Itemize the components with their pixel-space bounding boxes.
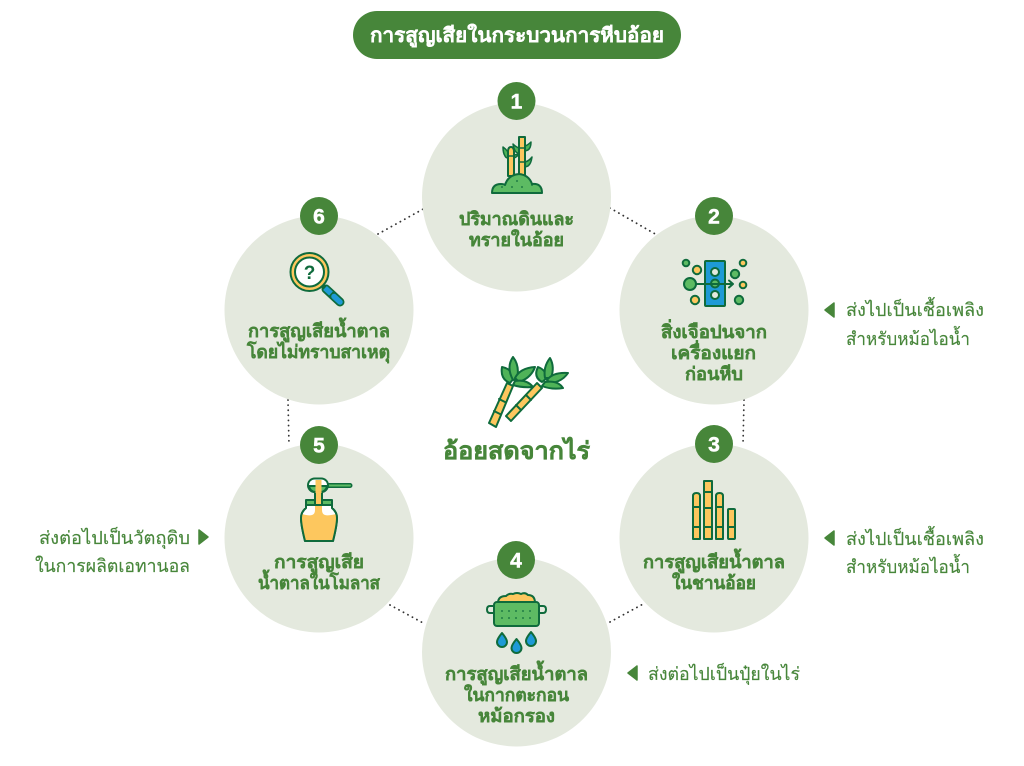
badge 3: 3 xyxy=(708,434,720,456)
label 1: ทรายในอ้อย xyxy=(469,229,564,250)
icon: cane on soil xyxy=(492,137,542,193)
icon: separator xyxy=(683,260,746,306)
label 2: เครื่องแยก xyxy=(671,340,756,363)
callout: step 5 output: ส่งต่อไปเป็นวัตถุดิบ xyxy=(39,526,190,549)
label 5 xyxy=(258,552,381,593)
panel: step 6 unknown loss xyxy=(224,197,414,404)
badge 4: 4 xyxy=(510,550,522,572)
badge 1: 1 xyxy=(511,90,523,114)
label 3: ในชานอ้อย xyxy=(672,572,756,593)
icon: magnifier: ? xyxy=(304,263,315,284)
panel: step 3 bagasse xyxy=(620,425,808,632)
label 5: น้ำตาลในโมลาส xyxy=(258,569,381,593)
badge 3 xyxy=(695,425,733,463)
callout: step 3 output xyxy=(825,526,984,577)
callout: step 2 output xyxy=(825,297,984,349)
panel: step 4 filter cake xyxy=(422,541,611,746)
label 2: ก่อนหีบ xyxy=(685,364,743,384)
center label: อ้อยสดจากไร่ xyxy=(443,436,590,465)
callout: step 4 output: ส่งต่อไปเป็นปุ๋ยในไร่ xyxy=(648,662,800,685)
callout: step 3 output: ส่งไปเป็นเชื้อเพลิง xyxy=(846,526,984,549)
label 3 xyxy=(643,548,785,593)
badge 1 xyxy=(498,82,536,120)
icon: strainer pot xyxy=(487,593,546,653)
icon: cut canes xyxy=(693,481,735,539)
label 3: การสูญเสียน้ำตาล xyxy=(643,548,785,574)
badge 2 xyxy=(695,197,733,235)
label 1 xyxy=(459,209,574,250)
icon: molasses jar xyxy=(301,478,350,541)
callout: step 2 output: สำหรับหม้อไอน้ำ xyxy=(846,326,970,349)
badge 4 xyxy=(497,541,535,579)
label 2: สิ่งเจือปนจาก xyxy=(661,319,767,342)
badge 2: 2 xyxy=(708,206,720,228)
badge 5 xyxy=(300,426,338,464)
label 4: ในกากตะกอน xyxy=(464,684,570,705)
label 4: หม้อกรอง xyxy=(478,706,555,726)
badge 5: 5 xyxy=(313,434,325,458)
label 4 xyxy=(445,660,588,726)
label 4: การสูญเสียน้ำตาล xyxy=(445,660,588,686)
badge 6 xyxy=(300,197,338,235)
badge 6: 6 xyxy=(313,206,325,228)
label 6: การสูญเสียน้ำตาล xyxy=(248,317,390,343)
panel: step 1 soil and sand xyxy=(422,82,611,292)
title: การสูญเสียในกระบวนการหีบอ้อย xyxy=(370,23,664,49)
label 1: ปริมาณดินและ xyxy=(459,209,574,229)
title xyxy=(353,11,681,59)
center: fresh sugarcane icon xyxy=(489,357,568,427)
label 6 xyxy=(246,317,390,364)
callout: step 5 output: ในการผลิตเอทานอล xyxy=(35,555,190,576)
callout: step 2 output: ส่งไปเป็นเชื้อเพลิง xyxy=(846,297,984,320)
label 5: การสูญเสีย xyxy=(274,552,364,574)
panel: step 2 impurities xyxy=(620,197,808,404)
label 6: โดยไม่ทราบสาเหตุ xyxy=(246,341,390,364)
label 2 xyxy=(661,319,767,384)
callout: step 5 output xyxy=(35,526,208,576)
callout: step 3 output: สำหรับหม้อไอน้ำ xyxy=(846,554,970,577)
panel: step 5 molasses xyxy=(224,426,414,632)
icon: magnifier xyxy=(290,253,340,302)
